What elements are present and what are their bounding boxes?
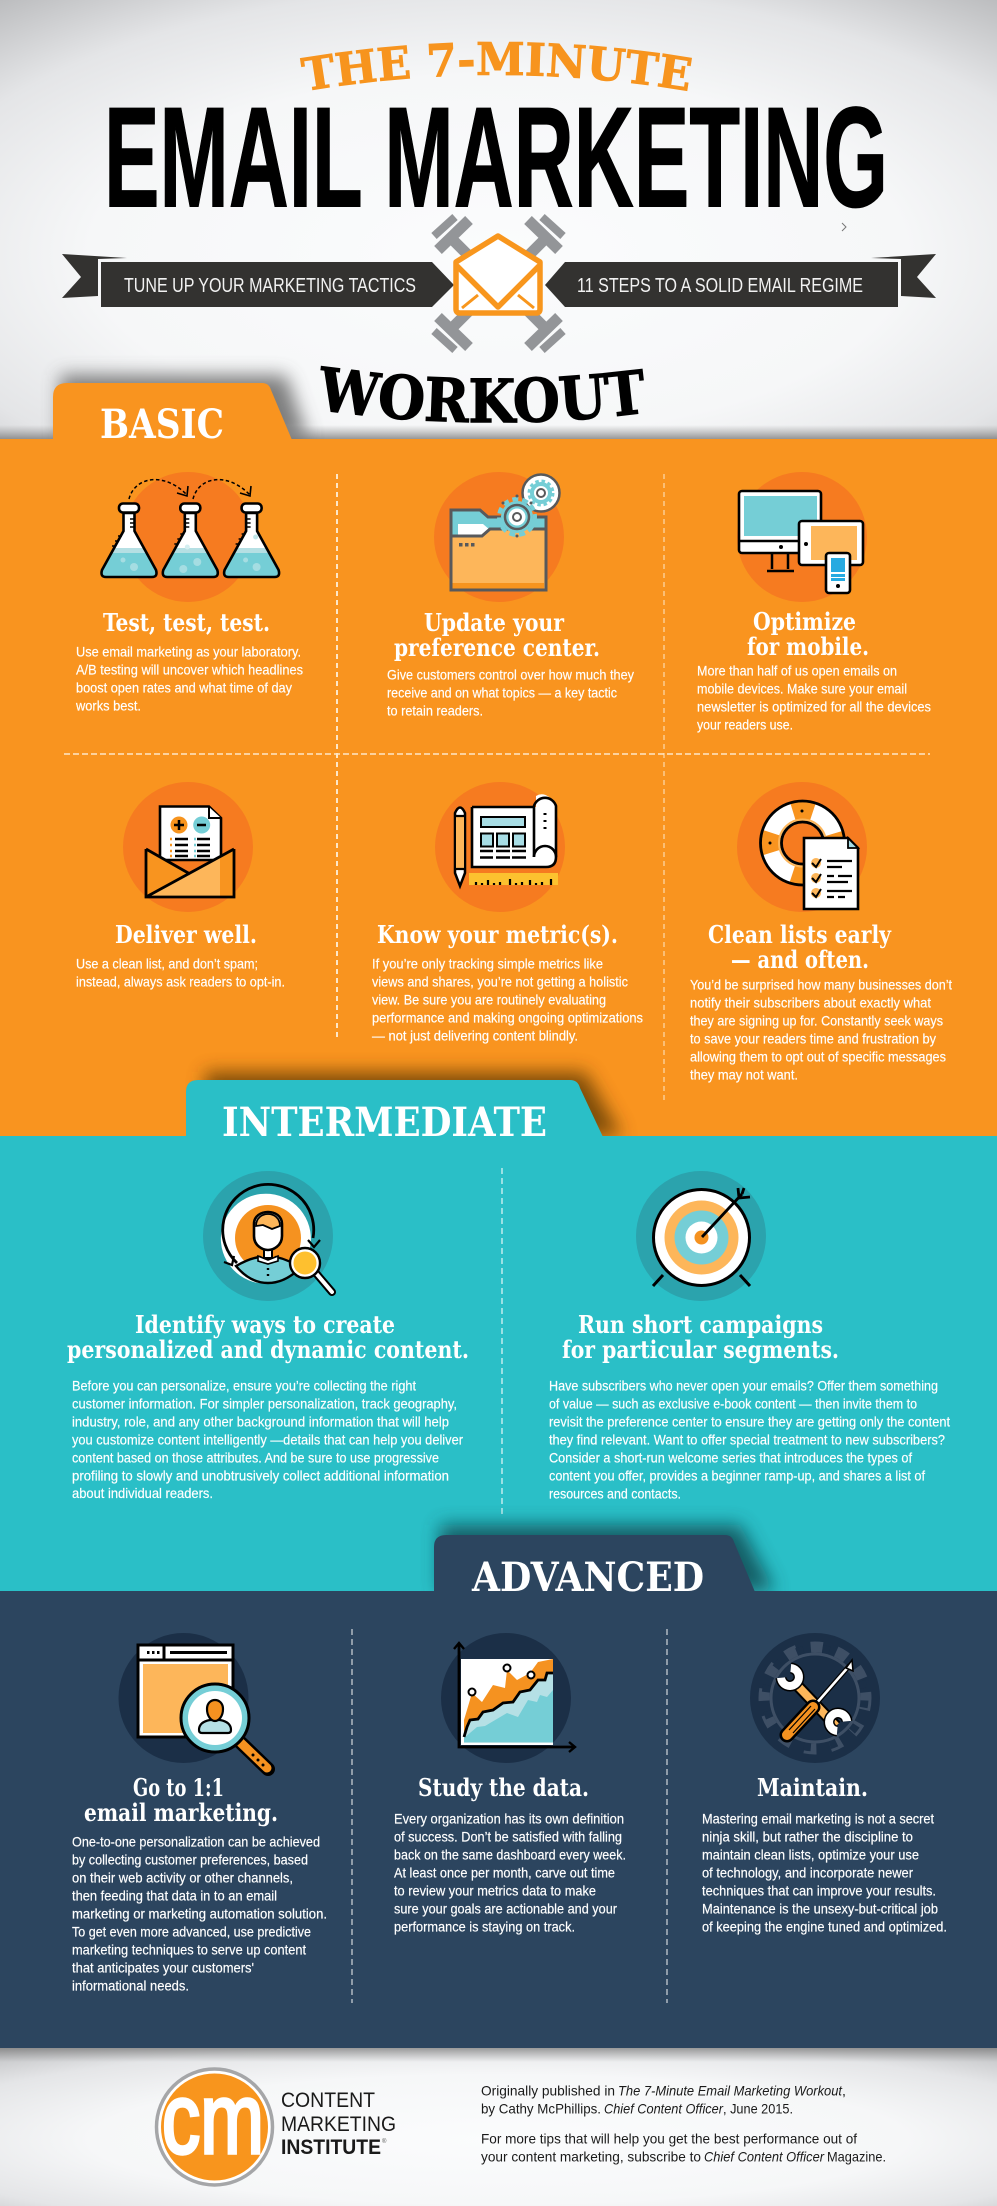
credits text: Originally published in — [481, 2082, 615, 2098]
heading: clean lists: — and often. — [731, 945, 869, 974]
text: personalized: content based on those attributes. And be sure to use progressive — [72, 1450, 439, 1466]
text: campaigns: Have subscribers who never open your emails? Offer them something — [549, 1378, 938, 1394]
text: preference: receive and on what topics — a key tactic — [387, 684, 617, 700]
card: deliver — [76, 782, 285, 990]
text: preference — [387, 666, 634, 718]
text: metrics: If you’re only tracking simple metrics like — [372, 956, 603, 972]
card: short campaigns — [549, 1171, 950, 1502]
text: personalized — [72, 1378, 463, 1501]
card: mobile — [697, 472, 931, 732]
text: campaigns: content you offer, provides a beginner ramp-up, and shares a list of — [549, 1468, 925, 1484]
text: metrics: performance and making ongoing optimizations — [372, 1010, 643, 1026]
text: go to 1:1: then feeding that data in to an email — [72, 1888, 277, 1904]
text: study: sure your goals are actionable and your — [394, 1900, 617, 1916]
text: study: performance is staying on track. — [394, 1918, 575, 1934]
icon: envelope with checklist — [123, 782, 253, 912]
intermediate tab shadow — [205, 1072, 622, 1136]
text: maintain — [702, 1810, 947, 1934]
text: campaigns: resources and contacts. — [549, 1486, 681, 1502]
text: study: of success. Don’t be satisfied with falling — [394, 1828, 622, 1844]
text: campaigns: Consider a short-run welcome series that introduces the types of — [549, 1450, 912, 1466]
text: go to 1:1: by collecting customer preferences, based — [72, 1852, 308, 1868]
credits text: by Cathy McPhillips. — [481, 2100, 601, 2116]
logo wordmark — [281, 2089, 396, 2159]
advanced title: ADVANCED — [471, 1554, 704, 1601]
heading: go to 1:1 — [84, 1773, 278, 1827]
main title group — [104, 42, 888, 238]
credits text — [481, 2082, 886, 2164]
text: study: to review your metrics data to make — [394, 1882, 596, 1898]
logo wordmark: ® — [382, 2138, 387, 2145]
text: mobile: mobile devices. Make sure your email — [697, 680, 907, 696]
heading: campaigns: for particular segments. — [562, 1335, 839, 1364]
text: personalized: about individual readers. — [72, 1485, 213, 1501]
text: campaigns: of value — such as exclusive e-book content — then invite them to — [549, 1396, 917, 1412]
card: maintain — [702, 1633, 947, 1934]
text: clean lists: to save your readers time and frustration by — [690, 1030, 936, 1046]
text: clean lists: notify their subscribers about exactly what — [690, 994, 931, 1010]
header background — [0, 0, 997, 439]
heading: deliver: Deliver well. — [115, 920, 257, 949]
heading: clean lists — [708, 920, 892, 974]
heading: go to 1:1: email marketing. — [84, 1798, 278, 1827]
logo wordmark: INSTITUTE — [281, 2136, 381, 2159]
text: maintain: maintain clean lists, optimize your use — [702, 1846, 919, 1862]
text: deliver: instead, always ask readers to opt-in. — [76, 974, 285, 990]
credits text: Chief Content Officer — [604, 2100, 724, 2116]
text: campaigns — [549, 1378, 950, 1502]
heading: maintain: Maintain. — [757, 1773, 868, 1802]
text: test: Use email marketing as your laboratory. — [76, 644, 301, 660]
heading: test: Test, test, test. — [103, 608, 270, 637]
text: test: boost open rates and what time of day — [76, 680, 292, 696]
icon: target — [636, 1171, 766, 1301]
card: preference center — [387, 472, 634, 718]
divider — [501, 1168, 503, 1518]
text: go to 1:1 — [72, 1834, 327, 1994]
text: go to 1:1: To get even more advanced, use predictive — [72, 1924, 311, 1940]
heading: personalized: personalized and dynamic content. — [67, 1335, 469, 1364]
logo wordmark: CONTENT — [281, 2089, 375, 2112]
text: mobile: your readers use. — [697, 716, 793, 732]
text: go to 1:1: marketing or marketing automation solution. — [72, 1906, 327, 1922]
icon: crossed dumbbells — [434, 217, 563, 350]
ribbon text left: TUNE UP YOUR MARKETING TACTICS — [124, 275, 416, 297]
text: study — [394, 1810, 626, 1934]
icon: flasks — [102, 472, 279, 602]
text: go to 1:1: One-to-one personalization can be achieved — [72, 1834, 320, 1850]
ribbon right — [545, 254, 936, 307]
text: maintain: Maintenance is the unsexy-but-critical job — [702, 1900, 938, 1916]
logo: content marketing institute — [156, 2063, 396, 2185]
text: maintain: of technology, and incorporate newer — [702, 1864, 913, 1880]
heading: preference: preference center. — [394, 633, 600, 662]
text: mobile: newsletter is optimized for all the devices — [697, 698, 931, 714]
panel: advanced section — [0, 1525, 997, 2048]
heading: preference: Update your — [424, 608, 565, 637]
heading: preference — [394, 608, 600, 662]
heading: metrics: Know your metric(s). — [377, 920, 618, 949]
text: study: back on the same dashboard every week. — [394, 1846, 626, 1862]
icon: wrench and screwdriver on gear — [750, 1633, 880, 1763]
title: the 7-minute: THE 7-MINUTE — [300, 42, 692, 92]
text: personalized: industry, role, and any other background information that will help — [72, 1414, 449, 1430]
logo mark: cm — [162, 2063, 264, 2175]
text: personalized: customer information. For simpler personalization, track geography, — [72, 1396, 457, 1412]
card: test — [75, 472, 303, 714]
text: campaigns: they find relevant. Want to offer special treatment to new subscribers? — [549, 1432, 945, 1448]
credits text: Chief Content Officer — [704, 2148, 825, 2164]
ribbon left — [62, 254, 454, 307]
text: test: works best. — [75, 698, 141, 714]
advanced tab shadow — [440, 1525, 775, 1591]
icon: envelope — [456, 236, 540, 313]
heading: clean lists: Clean lists early — [708, 920, 892, 949]
text: metrics: view. Be sure you are routinely evaluating — [372, 992, 606, 1008]
ribbon text right: 11 STEPS TO A SOLID EMAIL REGIME — [577, 275, 863, 297]
panel: footer — [0, 2048, 997, 2206]
title: workout — [320, 366, 644, 423]
credits text: Magazine. — [827, 2148, 886, 2164]
credits text: your content marketing, subscribe to — [481, 2148, 701, 2164]
text: metrics — [372, 956, 643, 1044]
text: personalized: profiling to slowly and unobtrusively collect additional information — [72, 1468, 449, 1484]
panel: basic section — [0, 375, 997, 1140]
dividers — [336, 474, 338, 1037]
text: go to 1:1: informational needs. — [72, 1978, 189, 1994]
text: maintain: Mastering email marketing is not a secret — [702, 1810, 934, 1826]
text: mobile: More than half of us open emails on — [697, 662, 897, 678]
panel: intermediate section — [0, 1072, 997, 1596]
text: clean lists: they may not want. — [690, 1066, 798, 1082]
text: clean lists: You’d be surprised how many businesses don’t — [690, 976, 952, 992]
text: campaigns: revisit the preference center to ensure they are getting only the content — [549, 1414, 950, 1430]
heading: mobile — [747, 607, 869, 661]
text: test: A/B testing will uncover which headlines — [76, 662, 303, 678]
icon: blueprint with pencil and ruler — [435, 782, 565, 912]
text: maintain: ninja skill, but rather the discipline to — [702, 1828, 913, 1844]
basic title: BASIC — [100, 401, 224, 448]
text: study: At least once per month, carve out time — [394, 1864, 615, 1880]
card: study the data — [394, 1633, 626, 1934]
text: clean lists: allowing them to opt out of specific messages — [690, 1048, 946, 1064]
card: personalized — [67, 1171, 469, 1501]
logo wordmark: MARKETING — [281, 2113, 396, 2136]
heading: mobile: Optimize — [753, 607, 856, 636]
heading: personalized: Identify ways to create — [135, 1310, 395, 1339]
text: deliver — [76, 956, 285, 990]
card: metrics — [372, 782, 643, 1044]
text: clean lists — [690, 976, 952, 1082]
heading: mobile: for mobile. — [747, 632, 869, 661]
icon: lifebuoy and checklist — [737, 782, 867, 912]
text: study: Every organization has its own definition — [394, 1810, 624, 1826]
basic tab — [53, 383, 292, 440]
card: clean lists — [690, 782, 952, 1082]
small chevron mark — [842, 223, 846, 231]
text: test — [75, 644, 303, 714]
text: go to 1:1: that anticipates your customers' — [72, 1960, 254, 1976]
text: deliver: Use a clean list, and don’t spam; — [76, 956, 258, 972]
card: go to 1:1 — [72, 1633, 327, 1994]
text: metrics: — not just delivering content blindly. — [372, 1028, 578, 1044]
heading: go to 1:1: Go to 1:1 — [133, 1773, 224, 1802]
heading: campaigns: Run short campaigns — [578, 1310, 823, 1339]
text: clean lists: they are signing up for. Constantly seek ways — [690, 1012, 943, 1028]
credits text: The 7-Minute Email Marketing Workout — [618, 2082, 843, 2098]
text: mobile — [697, 662, 931, 732]
basic tab shadow — [60, 375, 308, 439]
title: workout: WORKOUT — [320, 366, 644, 423]
heading: personalized — [67, 1310, 469, 1364]
text: personalized: Before you can personalize, ensure you’re collecting the right — [72, 1378, 416, 1394]
icon: person with magnifier — [203, 1171, 333, 1301]
text: preference: to retain readers. — [387, 702, 483, 718]
credits text: , June 2015. — [723, 2100, 793, 2116]
icon: devices — [737, 472, 867, 602]
icon: folder and gears — [434, 472, 564, 602]
text: go to 1:1: on their web activity or other channels, — [72, 1870, 293, 1886]
text: preference: Give customers control over how much they — [387, 666, 634, 682]
text: metrics: views and shares, you’re not getting a holistic — [372, 974, 628, 990]
advanced tab — [434, 1535, 755, 1592]
text: personalized: you customize content intelligently —details that can help you deliver — [72, 1432, 463, 1448]
text: maintain: techniques that can improve your results. — [702, 1882, 936, 1898]
heading: study: Study the data. — [418, 1773, 589, 1802]
dividers — [352, 1629, 667, 2003]
heading: campaigns — [562, 1310, 839, 1364]
credits text: , — [842, 2082, 846, 2098]
text: go to 1:1: marketing techniques to serve up content — [72, 1942, 306, 1958]
credits text: For more tips that will help you get the best performance out of — [481, 2130, 857, 2146]
text: maintain: of keeping the engine tuned and optimized. — [702, 1918, 947, 1934]
intermediate tab — [186, 1080, 603, 1137]
icon: chart — [441, 1633, 575, 1763]
icon: browser window with magnifier — [118, 1633, 268, 1769]
intermediate title: INTERMEDIATE — [222, 1099, 547, 1146]
